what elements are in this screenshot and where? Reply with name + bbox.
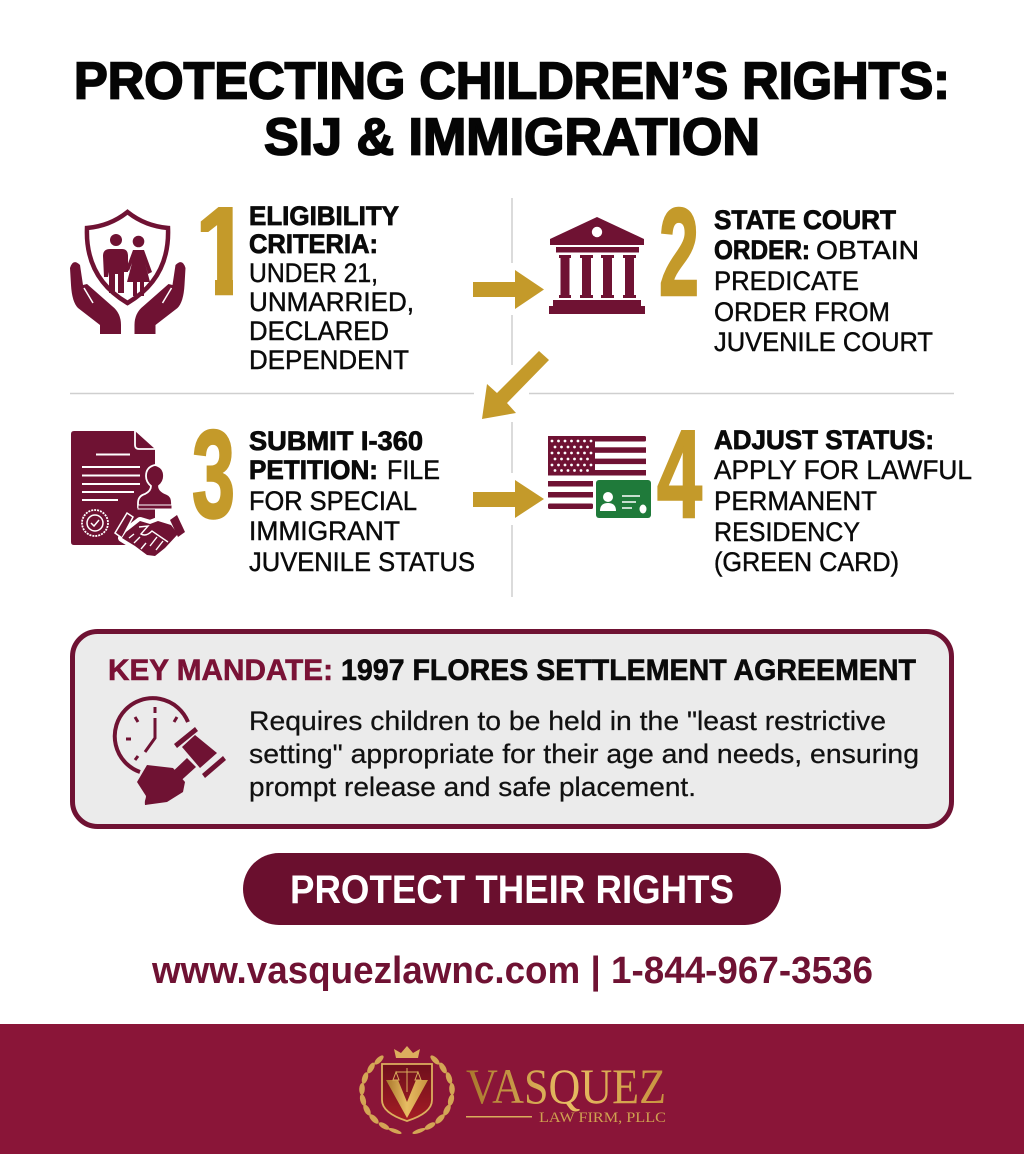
number 1: 1 [195, 183, 250, 321]
icon: clock and gavel [115, 698, 226, 805]
arrow: step 2 to step 3 [482, 351, 549, 419]
panel: key mandate callout [72, 632, 952, 826]
text: eligibility criteria: ELIGIBILITY [249, 201, 399, 231]
icon: courthouse [549, 217, 645, 314]
step 3: submit I-360 petition [71, 406, 475, 577]
text: adjust status: (GREEN CARD) [714, 547, 899, 577]
text: adjust status: ADJUST STATUS: [714, 425, 934, 455]
text: eligibility criteria: DEPENDENT [249, 345, 409, 375]
text: adjust status: PERMANENT [714, 486, 877, 516]
logo: wordmark: VASQUEZ [466, 1058, 666, 1114]
text: eligibility criteria: DECLARED [249, 316, 389, 346]
heading: key mandate: KEY MANDATE: [108, 654, 333, 687]
text: adjust status [714, 425, 972, 577]
text: adjust status: RESIDENCY [714, 517, 860, 547]
text: state court order [714, 205, 933, 357]
title [74, 52, 950, 166]
icon: document, stamp and handshake [71, 431, 185, 556]
text: submit I-360 petition: JUVENILE STATUS [249, 547, 475, 577]
text: mandate description [249, 706, 919, 802]
footer band [0, 1024, 1024, 1154]
text: adjust status: APPLY FOR LAWFUL [714, 455, 972, 485]
text: eligibility criteria: UNDER 21, [249, 258, 378, 288]
text: eligibility criteria: CRITERIA: [249, 229, 378, 259]
title: SIJ & IMMIGRATION [264, 108, 760, 166]
text: eligibility criteria [249, 201, 414, 375]
text: submit I-360 petition: IMMIGRANT [249, 516, 400, 546]
heading: key mandate [108, 654, 916, 687]
text: state court order: STATE COURT [714, 205, 896, 235]
number 4: 4 [657, 406, 702, 544]
arrow: step 1 to step 2 [473, 270, 544, 309]
contact line: www.vasquezlawnc.com | 1-844-967-3536 [151, 950, 873, 992]
text: submit I-360 petition: FOR SPECIAL [249, 486, 417, 516]
text: eligibility criteria: UNMARRIED, [249, 287, 414, 317]
text: state court order: PREDICATE [714, 266, 859, 296]
text: mandate description: setting" appropriate for their age and needs, ensuring [249, 739, 919, 769]
icon: shield with family held by hands [70, 212, 186, 334]
text: submit I-360 petition: PETITION: [249, 455, 378, 485]
text: state court order: ORDER: [714, 235, 810, 265]
text: submit I-360 petition: FILE [387, 455, 440, 485]
text: submit I-360 petition [249, 426, 475, 577]
logo: crest [359, 1046, 455, 1135]
icon: flag and green card [548, 436, 651, 518]
number 3: 3 [192, 406, 235, 544]
text: state court order: JUVENILE COURT [714, 327, 933, 357]
arrow: step 3 to step 4 [473, 480, 544, 518]
button: protect their rights [243, 853, 781, 925]
step 2: state court order [549, 184, 933, 357]
text: mandate description: Requires children to be held in the "least restrictive [249, 706, 886, 736]
text: state court order: ORDER FROM [714, 297, 890, 327]
title: PROTECTING CHILDREN’S RIGHTS: [74, 52, 950, 110]
logo: wordmark: LAW FIRM, PLLC [539, 1110, 666, 1126]
text: mandate description: prompt release and safe placement. [249, 772, 696, 802]
text: submit I-360 petition: SUBMIT I-360 [249, 426, 423, 456]
step 4: adjust status [548, 406, 972, 577]
heading: key mandate: 1997 FLORES SETTLEMENT AGREEMENT [341, 654, 916, 687]
button: protect their rights: PROTECT THEIR RIGHTS [290, 868, 734, 912]
step 1: eligibility criteria [70, 206, 412, 370]
text: state court order: OBTAIN [816, 235, 919, 265]
number 2: 2 [659, 184, 699, 322]
